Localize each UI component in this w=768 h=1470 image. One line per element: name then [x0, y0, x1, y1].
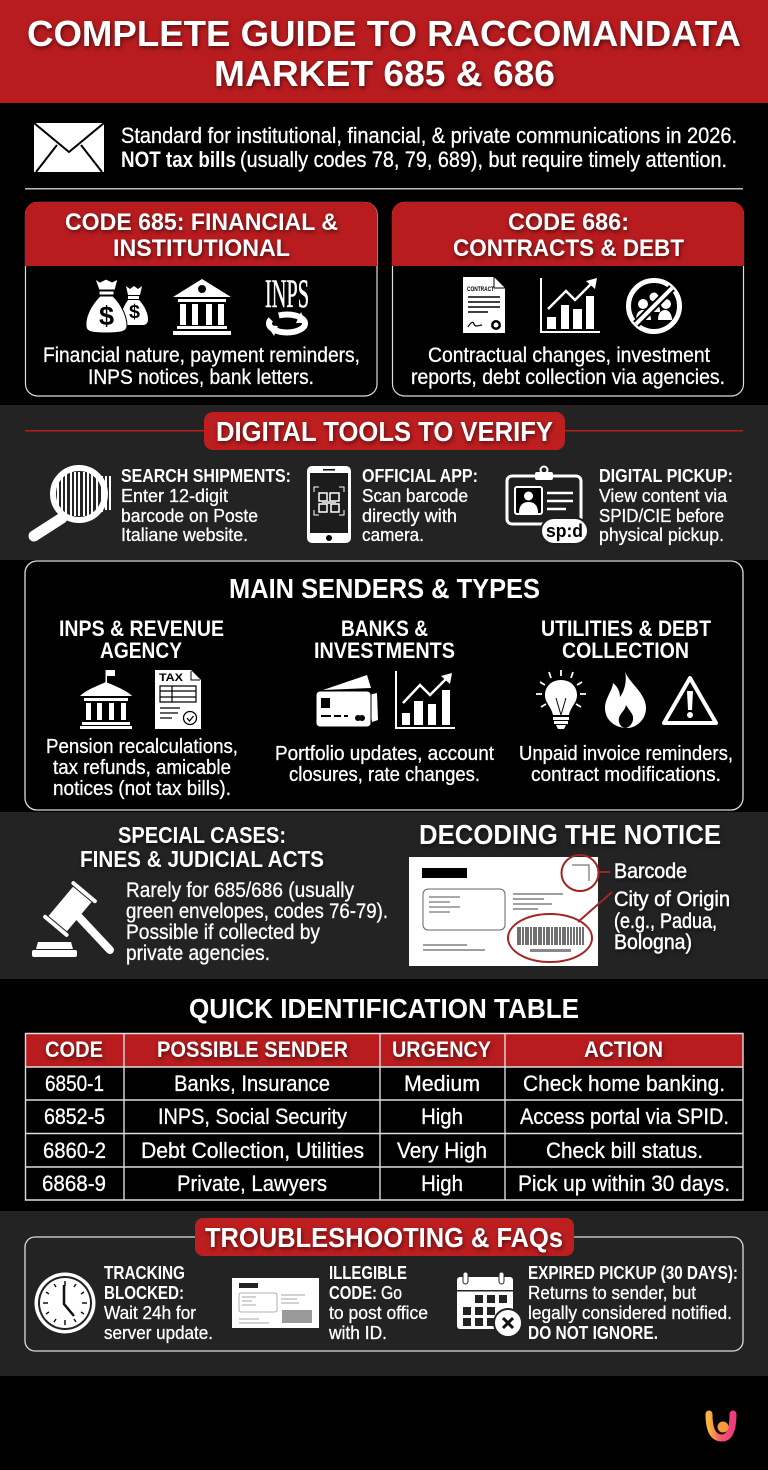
icon: no debt collectors	[628, 280, 680, 332]
table row 6850-1: 6850-1	[45, 1071, 104, 1096]
faq: illegible code	[328, 1262, 428, 1343]
icon: warning triangle	[664, 678, 716, 723]
icon: government building	[80, 670, 132, 729]
column: utilities and debt collection	[519, 616, 733, 786]
notice labels	[614, 860, 730, 954]
icon: clock	[34, 1272, 96, 1334]
body text: reports, debt collection via agencies.	[411, 366, 725, 389]
table header: CODE	[45, 1037, 103, 1062]
faq: illegible code: with ID.	[328, 1322, 387, 1343]
table row 6852-5: 6852-5	[44, 1104, 105, 1129]
heading: code 686: CODE 686:	[508, 209, 629, 236]
tool: search shipments: SEARCH SHIPMENTS:	[121, 465, 291, 486]
faq: illegible code: ILLEGIBLE	[329, 1262, 407, 1283]
faq: expired pickup: DO NOT IGNORE.	[528, 1322, 658, 1343]
description	[46, 736, 238, 800]
heading: code 686: CONTRACTS & DEBT	[453, 235, 684, 262]
table row 6852-5: INPS, Social Security	[158, 1104, 347, 1129]
column: utilities and debt collection: COLLECTION	[562, 638, 689, 663]
table header: URGENCY	[392, 1037, 491, 1062]
heading: code 685: CODE 685: FINANCIAL &	[65, 209, 338, 236]
table row 6850-1: Check home banking.	[523, 1071, 725, 1096]
tool: digital pickup: DIGITAL PICKUP:	[599, 465, 733, 486]
heading: special cases: SPECIAL CASES:	[118, 822, 286, 848]
table row 6852-5	[44, 1104, 729, 1129]
description: tax refunds, amicable	[53, 757, 231, 779]
description: closures, rate changes.	[289, 764, 480, 786]
description: Unpaid invoice reminders,	[519, 743, 733, 765]
title	[27, 13, 741, 94]
heading: main senders: MAIN SENDERS & TYPES	[229, 573, 540, 604]
column: banks and investments: INVESTMENTS	[314, 638, 455, 663]
text: special cases: Possible if collected by	[126, 921, 320, 944]
table	[25, 1033, 743, 1200]
notice labels: (e.g., Padua,	[614, 910, 717, 933]
faq: tracking blocked: Wait 24h for	[104, 1302, 196, 1323]
panel: code 686	[392, 202, 744, 396]
body text: Contractual changes, investment	[428, 344, 710, 367]
tool: official app: OFFICIAL APP:	[362, 465, 478, 486]
column: banks and investments: BANKS &	[341, 616, 428, 641]
tool: digital pickup: physical pickup.	[599, 524, 724, 545]
icon: ID badge with SPID	[507, 466, 588, 544]
section: special cases and decoding	[0, 812, 768, 979]
description: Portfolio updates, account	[275, 743, 494, 765]
table row 6868-9	[42, 1171, 730, 1196]
icon: flame	[605, 671, 646, 728]
table row 6868-9: 6868-9	[42, 1171, 106, 1196]
column: INPS and revenue agency: AGENCY	[100, 638, 182, 663]
heading pill: troubleshooting: TROUBLESHOOTING & FAQs	[205, 1222, 563, 1253]
heading: code 686	[453, 209, 684, 262]
icon: gavel	[32, 880, 110, 957]
icon: growth chart	[396, 671, 455, 728]
heading: code 685	[65, 209, 338, 262]
tool: official app: Scan barcode	[362, 485, 468, 506]
title: COMPLETE GUIDE TO RACCOMANDATA	[27, 13, 741, 54]
panel: code 685	[25, 202, 377, 396]
tool: official app: directly with	[362, 505, 457, 526]
heading: table: QUICK IDENTIFICATION TABLE	[189, 993, 579, 1024]
tool: digital pickup: View content via	[599, 485, 728, 506]
table row 6860-2	[43, 1138, 703, 1163]
table header: ACTION	[584, 1037, 663, 1062]
notice labels: Barcode	[614, 860, 687, 883]
table row 6860-2: Check bill status.	[546, 1138, 703, 1163]
icon: money bags: $	[99, 301, 114, 331]
icon: tax document: TAX	[159, 672, 184, 684]
title: MARKET 685 & 686	[214, 53, 555, 94]
tool: search shipments: barcode on Poste	[121, 505, 258, 526]
notice labels: City of Origin	[614, 888, 730, 911]
heading: special cases	[80, 822, 324, 872]
body text: Financial nature, payment reminders,	[43, 344, 360, 367]
icon: tax document	[155, 670, 201, 729]
callout circles	[562, 855, 598, 891]
text: special cases: green envelopes, codes 76-79).	[126, 900, 388, 923]
heading: special cases: FINES & JUDICIAL ACTS	[80, 846, 324, 872]
faq: tracking blocked: server update.	[104, 1322, 213, 1343]
icon: calendar	[457, 1272, 522, 1337]
icon: contract	[463, 277, 505, 333]
diagram: notice	[409, 855, 612, 966]
section: troubleshooting and FAQs	[0, 1211, 768, 1376]
icon: envelope	[34, 123, 104, 172]
body text: INPS notices, bank letters.	[88, 366, 314, 389]
table row 6852-5: Access portal via SPID.	[520, 1104, 729, 1129]
heading pill: digital tools: DIGITAL TOOLS TO VERIFY	[216, 416, 553, 447]
tool: digital pickup: SPID/CIE before	[599, 505, 724, 526]
column: utilities and debt collection: UTILITIES & DEBT	[541, 616, 711, 641]
table row 6850-1: Banks, Insurance	[174, 1071, 330, 1096]
tool: official app	[362, 465, 478, 545]
icon: contract: CONTRACT	[467, 286, 494, 293]
faq: tracking blocked	[104, 1262, 213, 1343]
text: special cases: private agencies.	[126, 942, 270, 965]
icon: INPS logo	[265, 271, 309, 336]
description	[519, 743, 733, 786]
body text	[43, 344, 360, 389]
icon: light bulb	[536, 670, 586, 729]
heading: decoding the notice: DECODING THE NOTICE	[419, 819, 721, 850]
text: special cases	[126, 879, 388, 965]
tool: official app: camera.	[362, 524, 424, 545]
table row 6860-2: 6860-2	[43, 1138, 106, 1163]
table header: POSSIBLE SENDER	[157, 1037, 348, 1062]
intro text: NOT tax bills	[121, 147, 236, 172]
intro text	[121, 123, 737, 172]
faq: illegible code: to post office	[329, 1302, 428, 1323]
icon: phone	[307, 466, 351, 543]
icon: money bags: $	[129, 302, 140, 323]
intro row	[34, 123, 737, 172]
tool: search shipments: Italiane website.	[121, 524, 248, 545]
barcode	[518, 927, 583, 945]
description: Pension recalculations,	[46, 736, 238, 758]
column: INPS and revenue agency: INPS & REVENUE	[59, 616, 224, 641]
header banner	[0, 0, 768, 103]
logo	[709, 1414, 733, 1438]
tool: search shipments: Enter 12-digit	[121, 485, 228, 506]
description	[275, 743, 494, 786]
section: digital tools	[0, 405, 768, 560]
tool: search shipments	[121, 465, 291, 545]
notice labels: Bologna)	[614, 931, 692, 954]
table row 6852-5: High	[421, 1104, 463, 1129]
faq: expired pickup: legally considered notified.	[528, 1302, 732, 1323]
faq: tracking blocked: BLOCKED:	[104, 1282, 184, 1303]
tool: digital pickup	[599, 465, 733, 545]
panel: main senders and types	[25, 561, 743, 810]
table row 6868-9: Private, Lawyers	[177, 1171, 327, 1196]
faq: expired pickup	[528, 1262, 738, 1343]
table header	[45, 1037, 663, 1062]
table row 6868-9: Pick up within 30 days.	[518, 1171, 730, 1196]
faq: expired pickup: Returns to sender, but	[528, 1282, 696, 1303]
icon: INPS logo: INPS	[265, 271, 309, 316]
section: quick identification table	[25, 993, 743, 1200]
icon: money bags	[86, 279, 148, 333]
faq: illegible code: CODE:	[329, 1282, 377, 1303]
faq: tracking blocked: TRACKING	[104, 1262, 185, 1283]
table row 6860-2: Very High	[397, 1138, 487, 1163]
description: contract modifications.	[531, 764, 721, 786]
description: notices (not tax bills).	[53, 778, 231, 800]
faq: illegible code: Go	[381, 1282, 402, 1303]
icon: bank	[173, 279, 231, 335]
icon: bank cards	[316, 675, 378, 727]
icon: ID badge with SPID: sp:d	[546, 521, 583, 541]
icon: growth chart	[541, 278, 600, 332]
table row 6860-2: Debt Collection, Utilities	[141, 1138, 364, 1163]
table row 6868-9: High	[421, 1171, 463, 1196]
icon: magnifier with barcode	[34, 468, 110, 536]
body text	[411, 344, 725, 389]
text: special cases: Rarely for 685/686 (usually	[126, 879, 354, 902]
heading: code 685: INSTITUTIONAL	[113, 235, 290, 262]
intro text: (usually codes 78, 79, 689), but require timely attention.	[240, 147, 727, 172]
column: banks and investments	[275, 616, 494, 786]
icon: notice thumbnail	[232, 1278, 319, 1328]
table row 6850-1	[45, 1071, 725, 1096]
table row 6850-1: Medium	[404, 1071, 480, 1096]
column: INPS and revenue agency	[46, 616, 238, 800]
